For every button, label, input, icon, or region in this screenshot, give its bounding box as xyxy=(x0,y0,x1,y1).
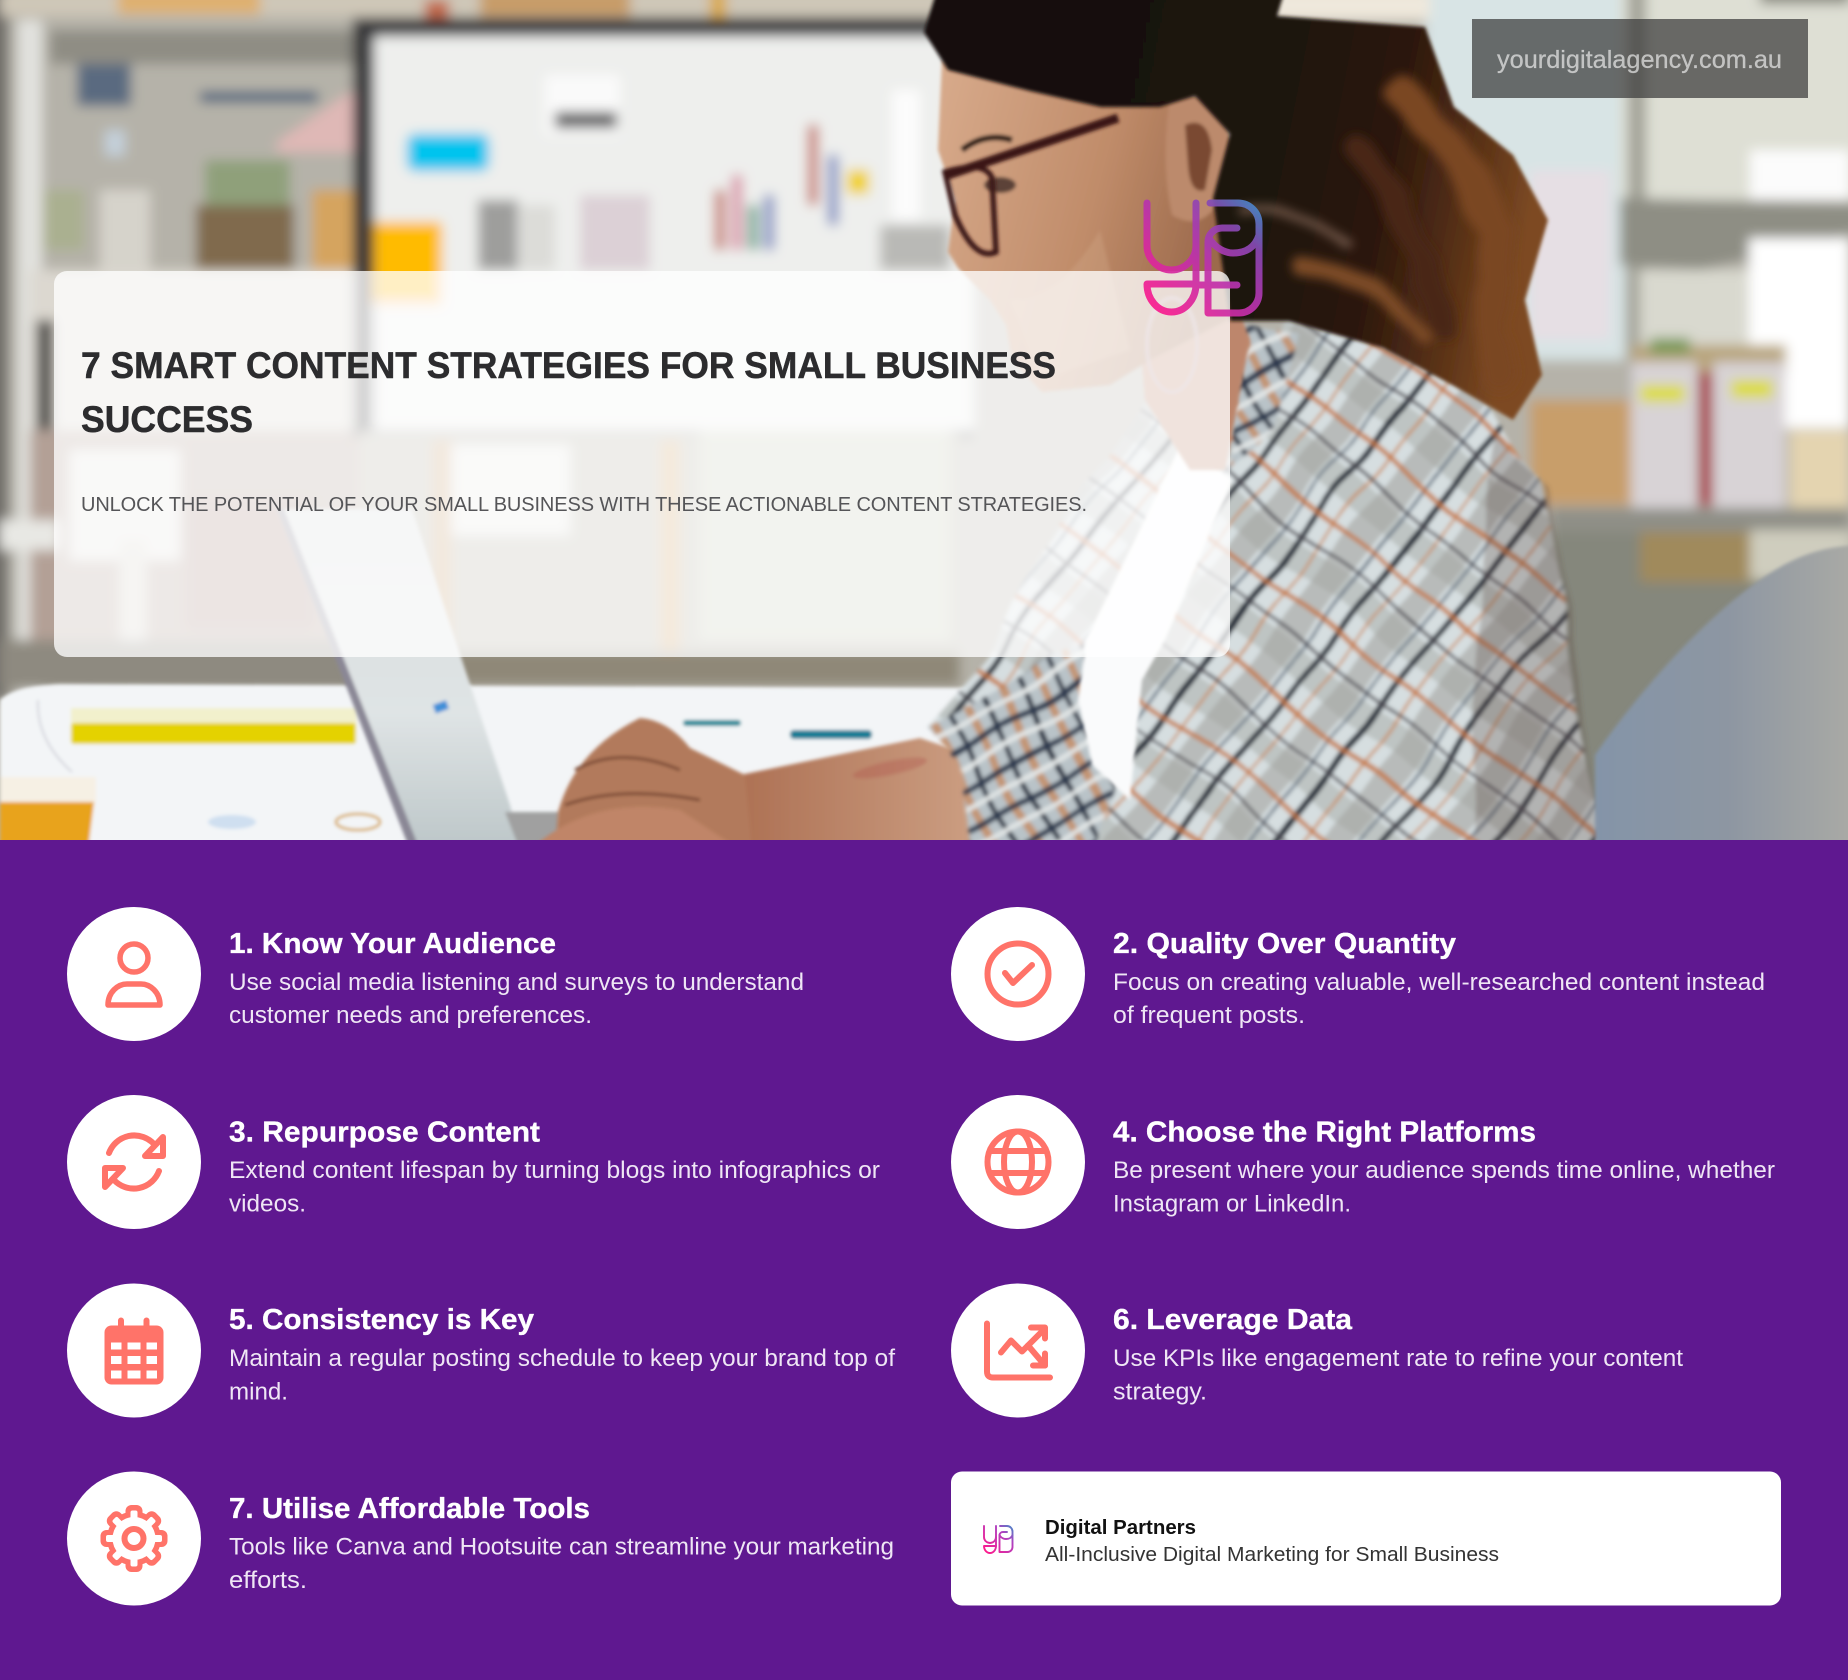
item text: efforts. xyxy=(229,1567,307,1594)
item text: Use KPIs like engagement rate to refine your content xyxy=(1113,1345,1683,1372)
item text: Focus on creating valuable, well-researched content instead xyxy=(1113,969,1765,996)
item text xyxy=(1113,1304,1683,1406)
title: SUCCESS xyxy=(81,399,253,440)
brand tagline: All-Inclusive Digital Marketing for Small Business xyxy=(1045,1544,1499,1566)
item 5: consistency is key xyxy=(67,1284,895,1418)
item text xyxy=(1113,1116,1775,1218)
item 7: utilise affordable tools xyxy=(67,1472,894,1606)
title xyxy=(81,345,1056,440)
item text: Tools like Canva and Hootsuite can streamline your marketing xyxy=(229,1534,894,1560)
subtitle: UNLOCK THE POTENTIAL OF YOUR SMALL BUSINESS WITH THESE ACTIONABLE CONTENT STRATEGIES. xyxy=(81,494,1087,516)
icon: calendar xyxy=(67,1284,201,1418)
title: 7 SMART CONTENT STRATEGIES FOR SMALL BUSINESS xyxy=(81,345,1056,386)
item text: 7. Utilise Affordable Tools xyxy=(229,1493,590,1525)
icon: refresh arrows xyxy=(67,1095,201,1229)
icon: person xyxy=(67,907,201,1041)
title panel xyxy=(54,271,1230,657)
item 1: know your audience xyxy=(67,907,804,1041)
icon: globe xyxy=(951,1095,1085,1229)
woman's glasses xyxy=(945,118,1118,254)
item text: videos. xyxy=(229,1190,306,1218)
item text xyxy=(229,928,804,1029)
icon: gear xyxy=(67,1472,201,1606)
large logo xyxy=(1147,203,1259,313)
item text: Use social media listening and surveys to understand xyxy=(229,969,804,996)
woman's neck and face xyxy=(938,60,1250,470)
item text xyxy=(229,1493,894,1594)
item text: 5. Consistency is Key xyxy=(229,1304,534,1336)
item text: Instagram or LinkedIn. xyxy=(1113,1190,1351,1218)
laptop xyxy=(277,509,560,850)
small logo xyxy=(984,1526,1012,1553)
item text: Be present where your audience spends time online, whether xyxy=(1113,1157,1775,1184)
brand name: Digital Partners xyxy=(1045,1517,1196,1539)
item text: Extend content lifespan by turning blogs into infographics or xyxy=(229,1157,880,1184)
item text: 3. Repurpose Content xyxy=(229,1116,540,1148)
item 4: choose the right platforms xyxy=(951,1095,1775,1229)
item text: mind. xyxy=(229,1378,288,1406)
item text: Maintain a regular posting schedule to keep your brand top of xyxy=(229,1345,895,1372)
purple content background xyxy=(0,840,1848,1680)
hero photo xyxy=(0,0,1848,860)
chair xyxy=(1595,545,1848,845)
icon: chart with arrows xyxy=(951,1284,1085,1418)
icon: check circle xyxy=(951,907,1085,1041)
item text: 2. Quality Over Quantity xyxy=(1113,928,1456,960)
item 3: repurpose content xyxy=(67,1095,880,1229)
item 2: quality over quantity xyxy=(951,907,1765,1041)
woman's shirt xyxy=(925,321,1610,860)
item text: strategy. xyxy=(1113,1378,1207,1406)
office background xyxy=(0,0,1848,860)
item text: customer needs and preferences. xyxy=(229,1002,592,1029)
item text xyxy=(229,1304,895,1406)
item text: 6. Leverage Data xyxy=(1113,1304,1353,1336)
desk surface xyxy=(0,684,1000,850)
woman's arm and hand xyxy=(539,716,972,840)
item text xyxy=(229,1116,880,1218)
brand card xyxy=(951,1472,1781,1606)
website badge xyxy=(1472,19,1808,98)
item 6: leverage data xyxy=(951,1284,1683,1418)
woman's hair xyxy=(924,0,1548,420)
website badge: yourdigitalagency.com.au xyxy=(1497,46,1782,74)
item text: of frequent posts. xyxy=(1113,1002,1305,1029)
item text: 1. Know Your Audience xyxy=(229,928,556,960)
item text xyxy=(1113,928,1765,1029)
item text: 4. Choose the Right Platforms xyxy=(1113,1116,1536,1148)
